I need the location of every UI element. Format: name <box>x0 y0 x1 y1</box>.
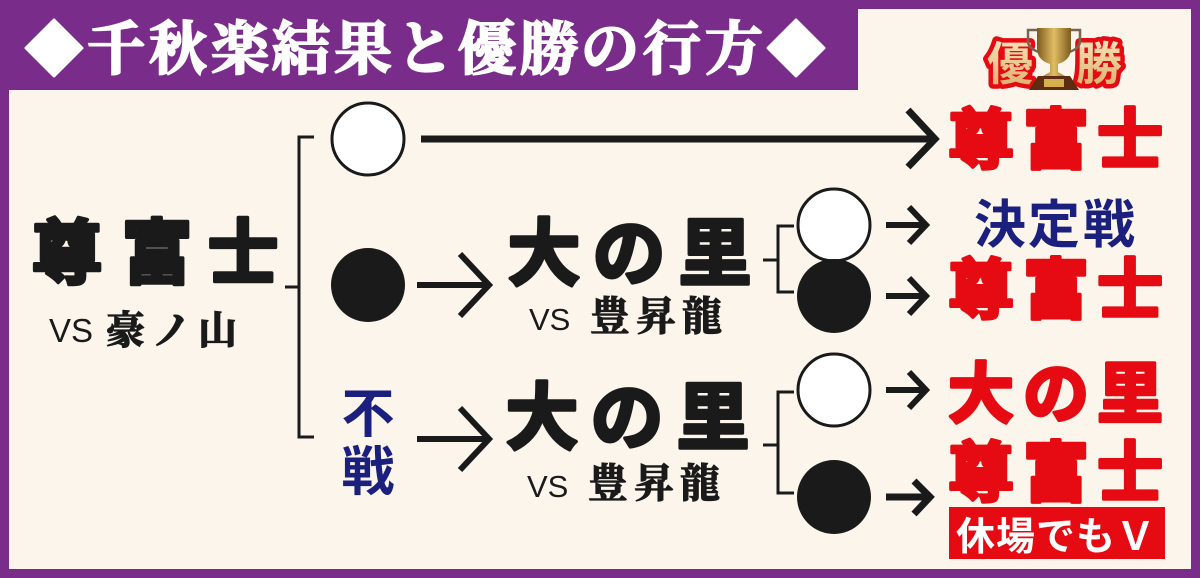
white circle: upper branch <box>798 189 870 261</box>
white circle: lower branch <box>798 354 870 426</box>
arrow: to 決定戦 <box>886 207 926 243</box>
arrow: top to 尊富士 <box>421 110 935 167</box>
icon: trophy with 優勝 <box>987 28 1122 90</box>
arrow: black circle to 大の里 <box>417 254 489 316</box>
name: 尊富士 (red, middle): 尊富士 <box>948 253 1163 327</box>
name: 尊富士 (red, top): 尊富士 <box>948 103 1163 177</box>
name: 大の里 vs 豊昇龍 (upper) <box>508 214 752 339</box>
name: 大の里 vs 豊昇龍 (upper): 大の里 <box>508 214 752 295</box>
label: 不戦: 戦 <box>342 443 394 502</box>
name: 尊富士 (red, lower): 尊富士 <box>948 436 1163 510</box>
title: 千秋楽結果と優勝の行方 <box>87 17 763 82</box>
black circle: lower branch <box>797 460 871 534</box>
name: 大の里 (red): 大の里 <box>948 357 1163 431</box>
name: 大の里 vs 豊昇龍 (lower): 大の里 <box>506 378 750 459</box>
arrow: to 尊富士 (lower) <box>886 481 930 514</box>
black circle: upper branch <box>797 259 871 333</box>
black circle: middle result <box>331 248 405 322</box>
callout: 休場でもV: 休場でもＶ <box>956 516 1156 559</box>
lower sub-bracket <box>763 392 794 493</box>
arrow: 不戦 to 大の里 <box>417 408 489 470</box>
name: 大の里 vs 豊昇龍 (lower): 豊昇龍 <box>588 461 726 506</box>
name: 大の里 vs 豊昇龍 (lower) <box>506 378 750 506</box>
name: 尊富士 vs 豪ノ山: 尊富士 <box>31 215 279 294</box>
white circle: top result <box>332 103 404 175</box>
label: 決定戦: 決定戦 <box>974 197 1135 255</box>
name: 尊富士 vs 豪ノ山: VS <box>49 312 93 349</box>
name: 尊富士 vs 豪ノ山: 豪ノ山 <box>106 310 244 353</box>
upper sub-bracket <box>763 226 794 292</box>
icon: trophy with 優勝: 勝 <box>1076 38 1122 90</box>
name: 大の里 vs 豊昇龍 (lower): VS <box>527 469 568 504</box>
name: 大の里 vs 豊昇龍 (upper): VS <box>529 302 570 337</box>
name: 大の里 vs 豊昇龍 (upper): 豊昇龍 <box>590 294 728 339</box>
arrow: to 尊富士 (middle) <box>886 278 926 314</box>
arrow: to 大の里 (red) <box>886 372 926 408</box>
label: 不戦: 不 <box>342 385 394 444</box>
icon: trophy with 優勝: 優 <box>987 38 1033 90</box>
name: 尊富士 vs 豪ノ山 <box>31 215 279 353</box>
main bracket from 尊富士 <box>285 137 314 437</box>
